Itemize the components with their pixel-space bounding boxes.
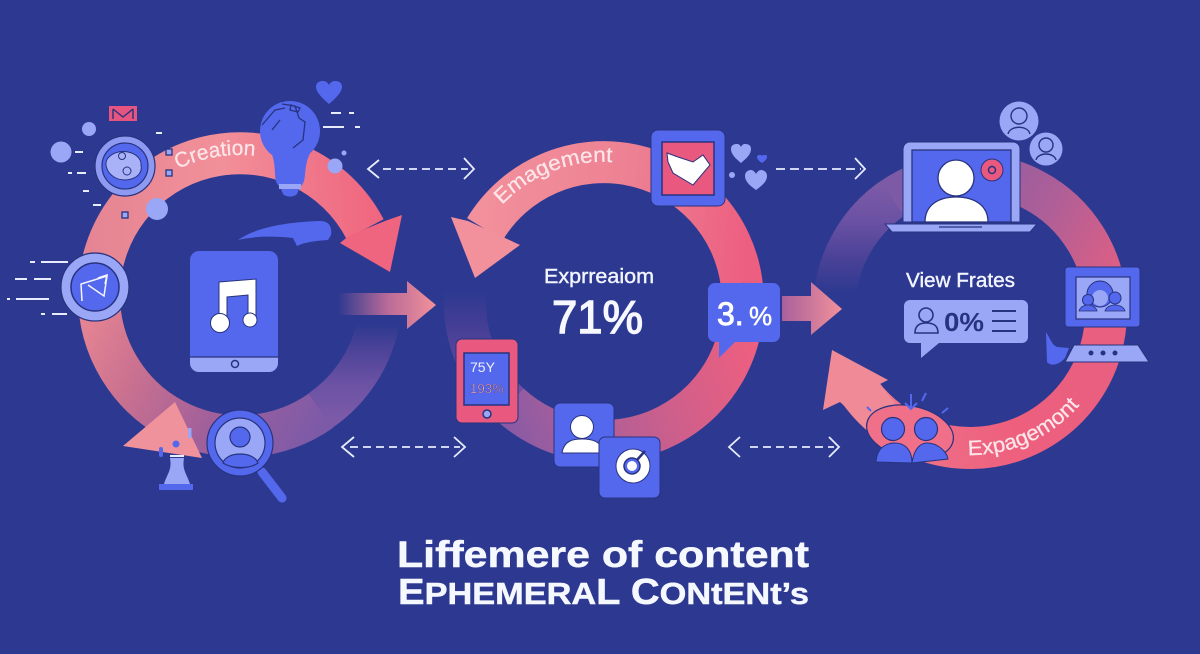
icons: small hearts	[729, 144, 767, 190]
icon: target tile	[599, 437, 660, 498]
icon: avatar 2	[1030, 132, 1062, 166]
ring: engagement left fade	[465, 290, 510, 404]
ring: upper arc	[892, 174, 1106, 310]
icon: trophy figure	[159, 428, 193, 490]
label: Emagement: Emagement	[493, 148, 612, 204]
arrow: gradient to engagement	[338, 281, 436, 329]
panel: view rates cycle	[816, 102, 1150, 469]
decorative squares	[122, 149, 172, 218]
icon: orbit badge	[95, 136, 155, 196]
icon: stats tablet	[456, 339, 518, 423]
icon: heart	[316, 81, 342, 104]
ring: engagement upper arc with arrowhead	[451, 162, 742, 283]
panel: creation cycle	[7, 81, 436, 502]
icon: magnifier with user	[207, 410, 282, 498]
callout: 0%	[904, 300, 1028, 358]
icon: keyboard	[1065, 345, 1149, 362]
callout: 0%: 0%	[944, 307, 984, 337]
arrow: dashed creation to engagement	[368, 158, 474, 179]
icon: arrow badge	[61, 253, 129, 321]
panel: engagement cycle	[444, 130, 780, 498]
icon: stats tablet: 75Y	[470, 359, 496, 375]
arrow: dashed engagement to view	[776, 158, 865, 179]
icon: triangle arrowhead	[123, 402, 202, 458]
icon: hand	[1046, 332, 1069, 365]
icon: laptop with user	[885, 142, 1037, 232]
arrow: dashed lower left	[342, 437, 465, 457]
stat: 71%: 71%	[552, 291, 643, 343]
arrow: dashed lower right	[729, 437, 839, 457]
callout: 3.%: 3.	[717, 296, 744, 332]
icon: swoosh	[238, 221, 331, 246]
ring: lower arc with arrowhead	[823, 310, 1106, 448]
title: EPHEMERA L CONtENt’s	[398, 571, 809, 612]
icon: heart tile	[651, 130, 725, 206]
icon: avatar 1	[1000, 102, 1038, 140]
icon: tablet with music note	[190, 251, 278, 372]
arrow: to view rates	[782, 282, 842, 335]
icon: stats tablet: 193%	[470, 382, 504, 396]
ring: creation lower arc	[99, 295, 320, 436]
callout: 3.%	[708, 283, 780, 358]
icon: user tile	[554, 403, 614, 467]
motion lines	[7, 113, 360, 314]
decorative dots	[50, 122, 346, 220]
title	[397, 534, 809, 612]
icon: monitor with group	[1065, 267, 1140, 327]
heading: Exprreaiom: Exprreaiom	[544, 266, 654, 288]
title: Liffemere of content	[397, 534, 809, 575]
ring: creation lower right fade	[320, 320, 379, 411]
callout: 3.%: %	[749, 301, 772, 331]
icon: two people	[862, 393, 958, 467]
label: Creation: Creation	[175, 140, 254, 167]
icon: globe lightbulb	[260, 101, 320, 197]
ring: engagement lower arc	[510, 283, 743, 441]
label: Expagemont: Expagemont	[969, 398, 1080, 458]
ring: left fade	[834, 198, 893, 300]
icon: mail	[109, 106, 137, 121]
heading: View Frates: View Frates	[906, 270, 1015, 292]
ring: creation upper arc with arrowhead	[99, 153, 402, 295]
